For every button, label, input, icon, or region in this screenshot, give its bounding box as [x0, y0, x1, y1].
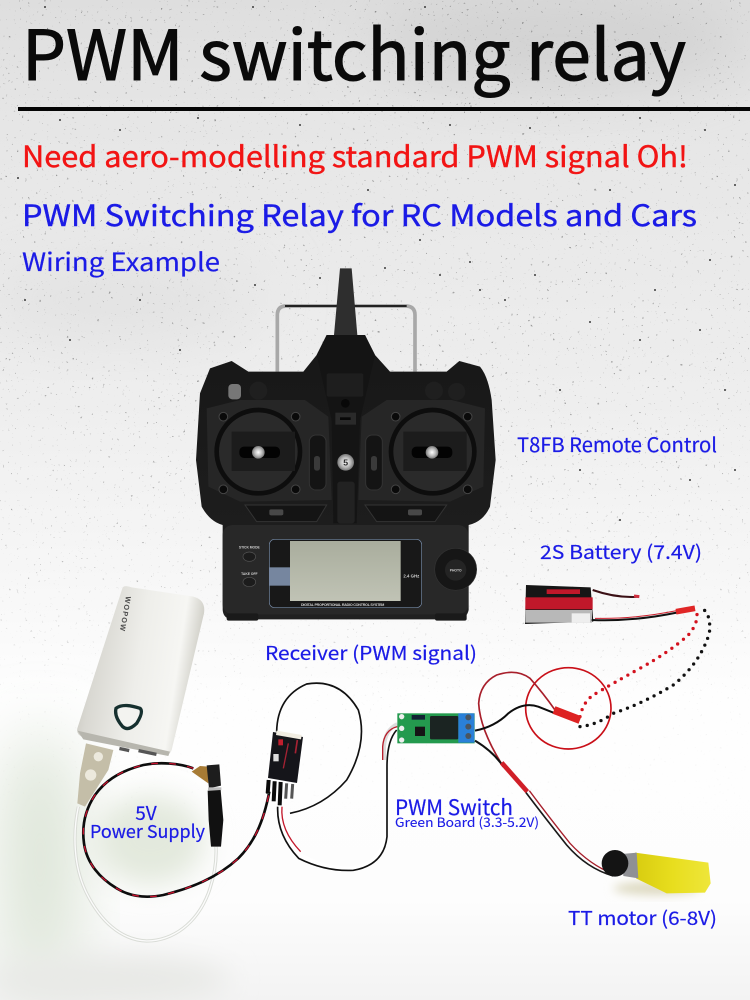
transmitter remote control: 5: [343, 458, 348, 468]
stick mode button: [239, 546, 261, 561]
bank logo: [116, 705, 141, 729]
5V power supply label: [90, 799, 206, 844]
5V power supply label: 5V: [135, 799, 157, 826]
USB plug: [77, 743, 113, 807]
battery: [525, 585, 695, 624]
black dotted wire: [580, 607, 710, 727]
top toggle switch: [228, 384, 241, 399]
center button: [337, 482, 355, 523]
PWM switch label: PWM Switch: [395, 792, 513, 822]
black lead from relay: [475, 705, 555, 731]
motor can: [622, 853, 638, 878]
relay: [430, 716, 458, 739]
transmitter body: [196, 335, 496, 619]
carry handle: [277, 306, 415, 372]
red dotted wire: [580, 608, 697, 717]
stick mode button: STICK MODE: [239, 546, 261, 550]
motor leads: [526, 793, 613, 876]
blue screen patch: [269, 567, 290, 586]
white USB cable: [75, 807, 216, 941]
gearbox: [635, 853, 711, 893]
photo knob: [435, 548, 477, 590]
blue subtitle: PWM Switching Relay for RC Models and Cars: [22, 193, 697, 235]
right gimbal: [389, 408, 477, 496]
highlight circle: [526, 668, 611, 749]
servo lead end: [384, 724, 397, 760]
power bank: [77, 586, 204, 756]
horizontal trims: [245, 505, 447, 522]
terminal block: [458, 713, 474, 743]
relay board: [397, 713, 475, 743]
red lead from relay: [479, 672, 555, 767]
motor end cap: [602, 850, 628, 877]
DC jack: [192, 764, 223, 847]
battery label: 2S Battery (7.4V): [540, 538, 702, 565]
battery main lead: [592, 613, 677, 620]
vertical trims: [309, 435, 382, 490]
brand text: WOPOW: [118, 596, 133, 632]
inline connector: [502, 763, 527, 792]
photo knob: PHOTO: [450, 568, 462, 572]
5V power supply label: Power Supply: [90, 818, 206, 844]
relay, battery and motor wiring: [383, 585, 711, 895]
system caption: DIGITAL PROPORTIONAL RADIO CONTROL SYSTEM: [301, 603, 384, 607]
PWM switch label: Green Board (3.3-5.2V): [395, 812, 539, 831]
take off button: TAKE OFF: [241, 572, 258, 576]
T8FB label: T8FB Remote Control: [517, 429, 717, 458]
title underline: [18, 107, 750, 111]
twisted power wire: [83, 763, 269, 897]
receiver antenna: [277, 683, 361, 813]
antenna: [334, 268, 357, 335]
title: PWM switching relay: [22, 0, 686, 100]
red warning text: Need aero-modelling standard PWM signal Oh!: [22, 134, 688, 176]
LCD display: [290, 541, 401, 601]
transmitter remote control: [196, 268, 496, 621]
battery balance lead: [593, 590, 638, 597]
receiver: [268, 731, 303, 805]
power bank and receiver wiring: [75, 586, 397, 941]
TT motor: [602, 850, 711, 895]
battery JST connector: [676, 608, 695, 612]
receiver label: Receiver (PWM signal): [265, 639, 477, 666]
center bolt: [337, 454, 354, 471]
JST connector: [554, 710, 580, 720]
gimbal screws: [219, 412, 472, 494]
screen housing: [223, 525, 468, 614]
servo lead to switch: [278, 727, 397, 870]
left gimbal: [214, 408, 302, 496]
take off button: [241, 572, 258, 587]
wiring example heading: Wiring Example: [22, 243, 220, 279]
PWM switch label: [395, 792, 539, 831]
feet: [227, 613, 467, 621]
TT motor label: TT motor (6-8V): [568, 904, 717, 931]
frequency badge: 2.4 GHz: [403, 573, 419, 578]
black lead to motor: [475, 741, 503, 767]
